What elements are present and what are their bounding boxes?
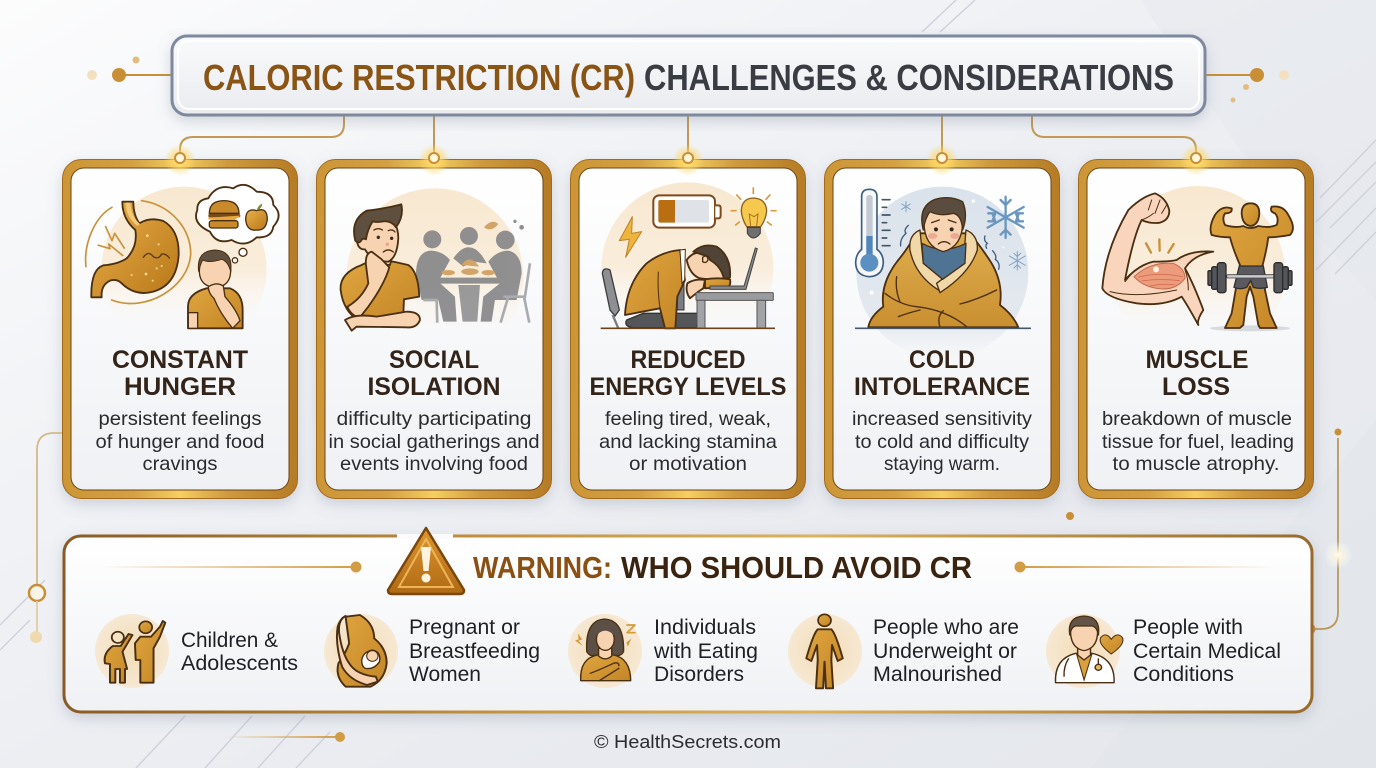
description: breakdown of muscle [1102,408,1292,430]
description: tissue for fuel, leading [1102,431,1294,453]
bottom decorative rule [225,732,345,742]
illustration: flexed arm and weightlifter [1102,186,1293,359]
panel: warning who should avoid CR [64,528,1312,712]
description: feeling tired, weak, [605,408,771,430]
item: individuals with eating disorders [568,614,758,688]
description: increased sensitivity [852,408,1032,430]
description: to muscle atrophy. [1112,453,1280,475]
icon: pregnant woman with baby [337,615,387,687]
label: People who are [873,616,1019,639]
label: with Eating [653,640,758,663]
description: to cold and difficulty [855,431,1029,453]
title text: CALORIC RESTRICTION (CR) [203,57,635,98]
panel: cold intolerance [824,144,1060,498]
illustration: exhausted man at laptop [601,182,776,354]
label: Conditions [1133,663,1234,686]
icon: child and adolescent [105,621,165,683]
panel: constant hunger [62,144,298,498]
label: Pregnant or [409,616,520,639]
small decorative dot [1066,512,1074,520]
heading: ENERGY LEVELS [590,373,786,401]
label: Adolescents [181,652,298,675]
heading: CONSTANT [112,346,248,374]
warning heading: WHO SHOULD AVOID CR [621,550,972,585]
icon: warning triangle [388,528,464,594]
label: Children & [181,629,278,652]
icon: distressed woman [575,619,636,681]
icon: thin person [806,614,843,688]
item: people with certain medical conditions [1046,614,1281,688]
description: and lacking stamina [599,431,777,453]
label: Women [409,663,481,686]
title banner [172,36,1205,115]
description: cravings [142,453,218,475]
panel: social isolation [316,144,552,498]
illustration: person in blanket with thermometer and snowflakes [855,187,1031,359]
label: Disorders [654,663,744,686]
warning heading: WARNING: [473,550,612,585]
warning rule left [100,562,362,572]
description: staying warm. [884,453,1000,475]
illustration: lonely man and diners [341,188,530,365]
heading: INTOLERANCE [854,373,1030,401]
item: pregnant or breastfeeding women [324,614,540,688]
panel: muscle loss [1078,144,1314,498]
warning rule right [1014,562,1275,572]
description: in social gatherings and [328,431,540,453]
footer credit: © HealthSecrets.com [594,732,781,752]
panel: reduced energy levels [570,144,806,498]
label: Malnourished [873,663,1002,686]
label: Individuals [654,616,756,639]
item: children and adolescents [95,614,298,688]
description: persistent feelings [98,408,262,430]
label: Certain Medical [1133,640,1281,663]
heading: HUNGER [124,373,236,401]
illustration: stomach, thought bubble and person [86,185,279,352]
connectors from title to cards [180,116,1196,159]
header decoration right [1206,68,1289,102]
heading: MUSCLE [1146,346,1248,374]
title text: CHALLENGES & CONSIDERATIONS [644,57,1174,98]
heading: ISOLATION [368,373,500,401]
heading: REDUCED [630,346,746,374]
label: Underweight or [873,640,1017,663]
label: People with [1133,616,1243,639]
description: events involving food [340,453,528,475]
left side connector [29,433,62,643]
description: or motivation [629,453,747,475]
label: Breastfeeding [409,640,540,663]
icon: doctor with heart [1055,616,1123,683]
heading: COLD [909,346,975,374]
description: difficulty participating [336,408,532,430]
item: underweight or malnourished people [788,614,1019,688]
heading: SOCIAL [389,346,479,374]
heading: LOSS [1162,373,1230,401]
right side connector [1304,428,1352,634]
description: of hunger and food [96,431,264,453]
header decoration left [87,56,171,82]
